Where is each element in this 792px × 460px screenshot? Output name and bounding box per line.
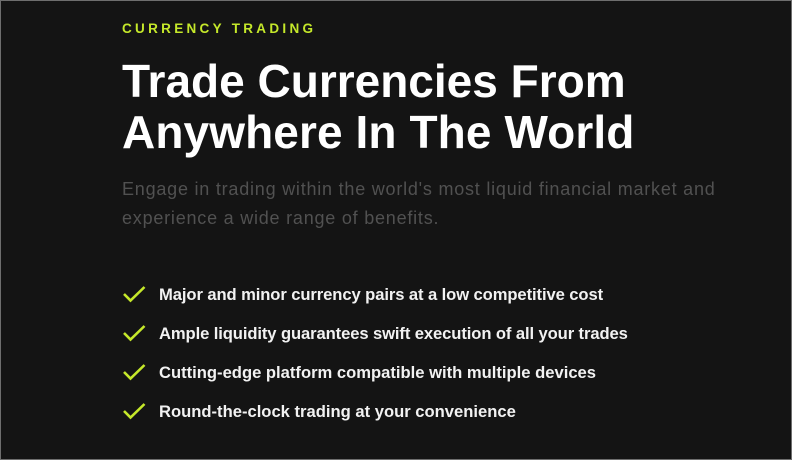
list item: currency pairs: Major and minor currency pairs at a low competitive cost: [159, 285, 603, 304]
title: Anywhere In The World: [122, 106, 634, 158]
list item: liquidity: Ample liquidity guarantees swift execution of all your trades: [159, 324, 628, 343]
feature list: [123, 285, 628, 421]
list item: round-the-clock: Round-the-clock trading at your convenience: [159, 402, 516, 421]
title: [122, 55, 634, 158]
title: Trade Currencies From: [122, 55, 626, 107]
description text: Engage in trading within the world's most liquid financial market and: [122, 179, 716, 199]
eyebrow label: CURRENCY TRADING: [122, 21, 316, 36]
list item: platform: Cutting-edge platform compatible with multiple devices: [159, 363, 596, 382]
description text: [122, 179, 716, 228]
description text: experience a wide range of benefits.: [122, 208, 439, 228]
